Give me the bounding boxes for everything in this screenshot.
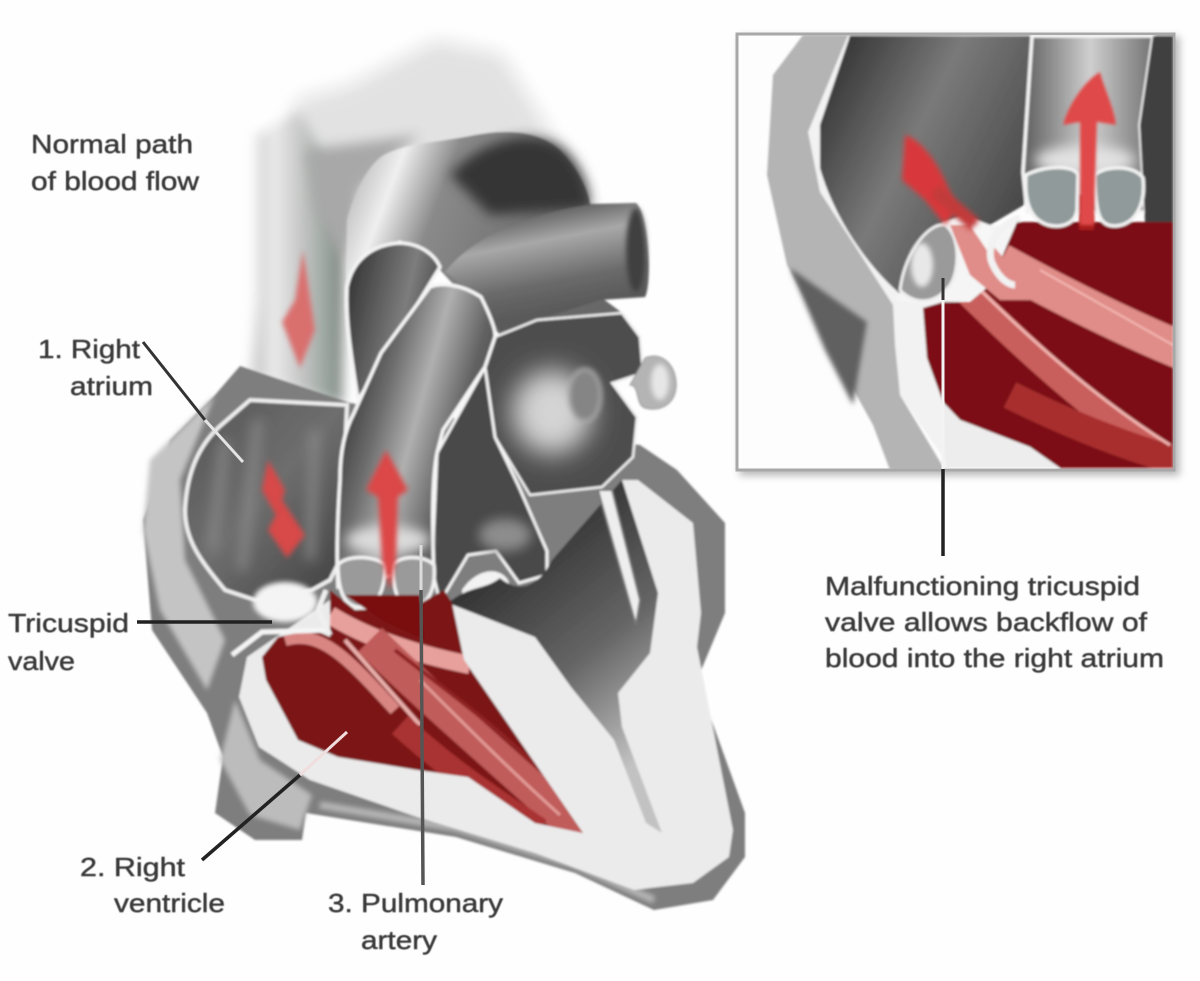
white valve knob [462, 571, 509, 610]
outer wall of heart [143, 366, 745, 910]
leaflet highlight [911, 243, 933, 287]
right ventricle [923, 222, 1173, 468]
leaflet shadow [895, 215, 1017, 305]
right atrium [820, 36, 1032, 298]
heart muscle white interior [239, 480, 733, 890]
pale bottom wall streak [320, 805, 654, 900]
left ventricle cavity [448, 480, 662, 833]
label: malfunctioning tricuspid valve: blood into the right atrium [825, 643, 1164, 673]
light patch above cusps [1035, 146, 1135, 174]
highlight in left chamber [512, 370, 592, 454]
heart illustration [143, 40, 745, 910]
pulmonary flow arrow [366, 450, 408, 590]
label: right atrium: 1. Right [38, 334, 141, 364]
atrium white floor [253, 582, 317, 622]
aortic cut end shading [626, 208, 646, 292]
darker tissue near aorta [305, 135, 420, 260]
dark right area [1140, 36, 1173, 222]
label: malfunctioning tricuspid valve: valve allows backflow of [825, 607, 1148, 637]
tricuspid valve [232, 630, 330, 655]
left valve leaflets [598, 490, 640, 625]
superior vena cava wisps [295, 40, 590, 230]
light patch on bulb [479, 519, 531, 551]
label: normal path of blood flow: of blood flow [31, 166, 199, 196]
vena cava flow arrow [282, 250, 315, 368]
label: right ventricle: 2. Right [80, 852, 186, 882]
light patch above cusps [346, 526, 430, 554]
inset frame [737, 34, 1174, 470]
outer grey wall [767, 35, 945, 470]
valve knob [630, 356, 676, 409]
label: right atrium: atrium [70, 371, 153, 401]
pulmonary bulb right [432, 367, 547, 602]
aortic cross tube [445, 203, 649, 332]
lower wall dark fold [790, 268, 867, 405]
superior vena cava tube [252, 110, 345, 405]
label: right ventricle: ventricle [114, 888, 225, 918]
tricuspid support [318, 590, 330, 635]
atrium flow arrow [262, 460, 305, 558]
left heart chamber [485, 313, 643, 495]
label: malfunctioning tricuspid valve: Malfunctioning tricuspid [825, 571, 1140, 601]
white valve gap [970, 224, 990, 251]
inset content [767, 35, 1185, 470]
atrium streaks [212, 420, 315, 570]
label: pulmonary artery: artery [361, 925, 437, 955]
aorta arch [347, 132, 648, 335]
pulmonary valve cusps [338, 558, 434, 607]
right atrium chamber [185, 400, 347, 600]
dark red centre between cusps [1079, 195, 1094, 230]
pulmonary artery [337, 285, 495, 587]
pulmonary artery tube [1023, 36, 1153, 212]
pale left wall band [143, 395, 225, 690]
pulmonary flow arrow [1063, 72, 1116, 225]
inset: malfunctioning valve [737, 34, 1185, 470]
oval in left chamber [569, 369, 601, 421]
right ventricle [262, 590, 583, 833]
tricuspid leaflet [900, 225, 957, 301]
leader lines [137, 278, 943, 885]
pulmonary valve cusps [1026, 168, 1143, 226]
inner aortic tube [347, 243, 440, 400]
label: tricuspid valve: Tricuspid [8, 608, 129, 638]
ventricle muscle bands [950, 262, 1185, 470]
dark red ventricle pocket [345, 595, 425, 640]
ventricular muscle bands [285, 615, 590, 840]
white ventricle lower edge [943, 402, 1060, 468]
label: normal path of blood flow: Normal path [31, 129, 193, 159]
dark aortic shading [450, 138, 590, 215]
regurgitant jet stem [935, 190, 975, 225]
pale lower wall band [220, 700, 312, 830]
label: pulmonary artery: 3. Pulmonary [328, 888, 503, 918]
second leaflet curve [990, 218, 1020, 285]
pink strip from valve [950, 225, 1040, 300]
label: tricuspid valve: valve [8, 646, 75, 676]
white strip [808, 35, 945, 460]
regurgitant arrow [902, 135, 955, 225]
knob highlight [651, 364, 669, 400]
